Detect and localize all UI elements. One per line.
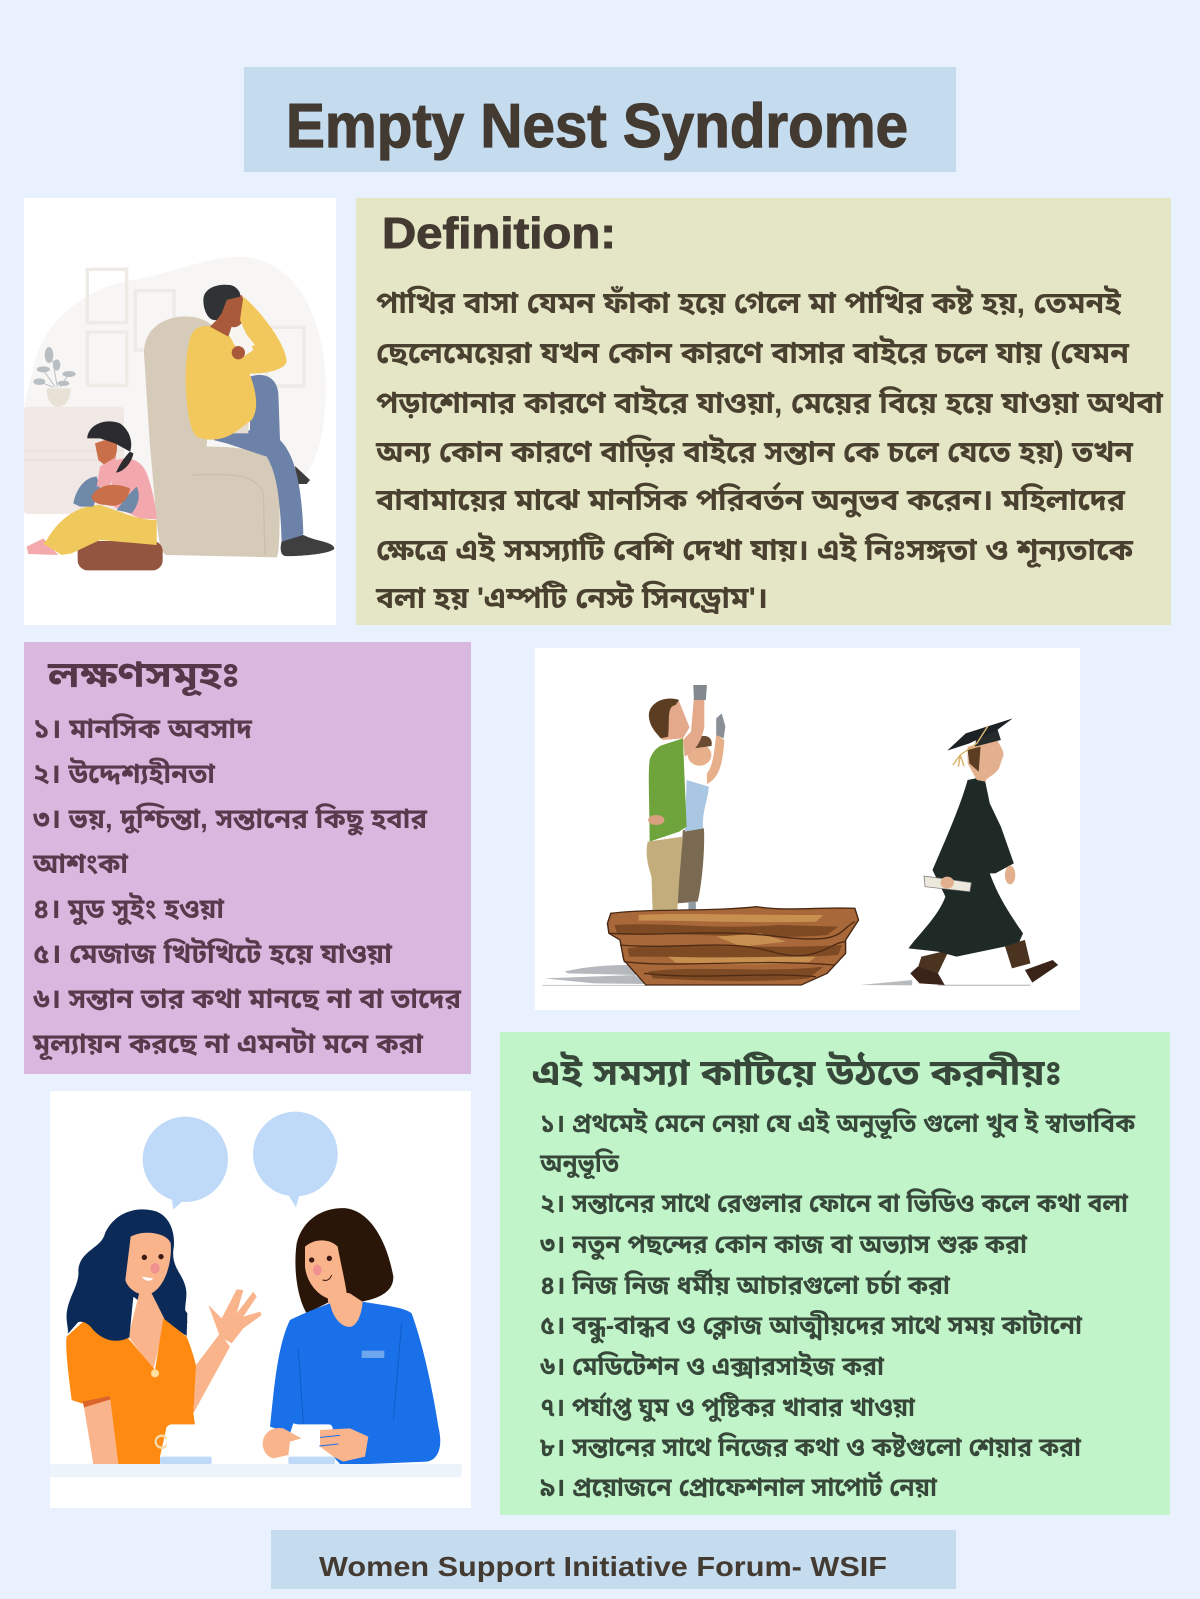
panel: what to do: ৯। প্রয়োজনে প্রোফেশনাল সাপোর্ট নেয়া (540, 1470, 938, 1502)
panel: what to do: এই সমস্যা কাটিয়ে উঠতে করনীয়ঃ (532, 1051, 1062, 1093)
panel: symptoms: ৪। মুড সুইং হওয়া (33, 892, 225, 926)
illustration: parents waving from nest at graduate (535, 648, 1080, 1010)
panel: definition: বলা হয় 'এম্পটি নেস্ট সিনড্রোম'। (375, 580, 768, 615)
title banner: Empty Nest Syndrome (286, 92, 908, 161)
panel: what to do: ৫। বন্ধু-বান্ধব ও ক্লোজ আত্মীয়দের সাথে সময় কাটানো (540, 1309, 1083, 1345)
panel: definition: পাখির বাসা যেমন ফাঁকা হয়ে গেলে মা পাখির কষ্ট হয়, তেমনই (376, 285, 1121, 320)
panel: symptoms (24, 642, 471, 1074)
panel: definition: পড়াশোনার কারণে বাইরে যাওয়া, মেয়ের বিয়ে হয়ে যাওয়া অথবা (376, 385, 1164, 420)
panel: symptoms: ১। মানসিক অবসাদ (33, 712, 253, 744)
panel: definition: বাবামায়ের মাঝে মানসিক পরিবর্তন অনুভব করেন। মহিলাদের (375, 482, 1126, 518)
panel: symptoms: ২। উদ্দেশ্যহীনতা (33, 757, 216, 789)
panel: definition: ক্ষেত্রে এই সমস্যাটি বেশি দেখা যায়। এই নিঃসঙ্গতা ও শূন্যতাকে (376, 532, 1134, 568)
panel: symptoms: লক্ষণসমূহঃ (47, 654, 240, 697)
panel: definition: Definition: (382, 209, 616, 258)
panel: definition: অন্য কোন কারণে বাড়ির বাইরে সন্তান কে চলে যেতে হয়) তখন (375, 434, 1133, 469)
panel: what to do (500, 1032, 1170, 1515)
panel: symptoms: মূল্যায়ন করছে না এমনটা মনে করা (32, 1027, 424, 1061)
panel: what to do: ৭। পর্যাপ্ত ঘুম ও পুষ্টিকর খাবার খাওয়া (540, 1391, 916, 1424)
title banner (244, 67, 956, 172)
panel: what to do: ৩। নতুন পছন্দের কোন কাজ বা অভ্যাস শুরু করা (540, 1229, 1028, 1261)
panel: what to do: ২। সন্তানের সাথে রেগুলার ফোনে বা ভিডিও কলে কথা বলা (540, 1187, 1129, 1218)
panel: symptoms: ৬। সন্তান তার কথা মানছে না বা তাদের (33, 983, 462, 1014)
panel: what to do: ৪। নিজ নিজ ধর্মীয় আচারগুলো চর্চা করা (540, 1268, 951, 1300)
panel: what to do: ৮। সন্তানের সাথে নিজের কথা ও কষ্টগুলো শেয়ার করা (540, 1431, 1082, 1462)
panel: what to do: অনুভূতি (539, 1147, 620, 1180)
footer banner: Women Support Initiative Forum- WSIF (319, 1551, 887, 1582)
panel: symptoms: ৩। ভয়, দুশ্চিন্তা, সন্তানের কিছু হবার (33, 802, 428, 836)
panel: symptoms: ৫। মেজাজ খিটখিটে হয়ে যাওয়া (33, 937, 393, 969)
panel: what to do: ১। প্রথমেই মেনে নেয়া যে এই অনুভূতি গুলো খুব ই স্বাভাবিক (540, 1107, 1136, 1140)
panel: what to do: ৬। মেডিটেশন ও এক্সারসাইজ করা (540, 1350, 885, 1381)
footer banner (271, 1530, 956, 1589)
illustration: sad parent and child (24, 198, 336, 625)
panel: definition (356, 198, 1171, 625)
panel: definition: ছেলেমেয়েরা যখন কোন কারণে বাসার বাইরে চলে যায় (যেমন (376, 335, 1129, 370)
panel: symptoms: আশংকা (32, 848, 129, 879)
illustration: two women talking over coffee (50, 1091, 471, 1508)
